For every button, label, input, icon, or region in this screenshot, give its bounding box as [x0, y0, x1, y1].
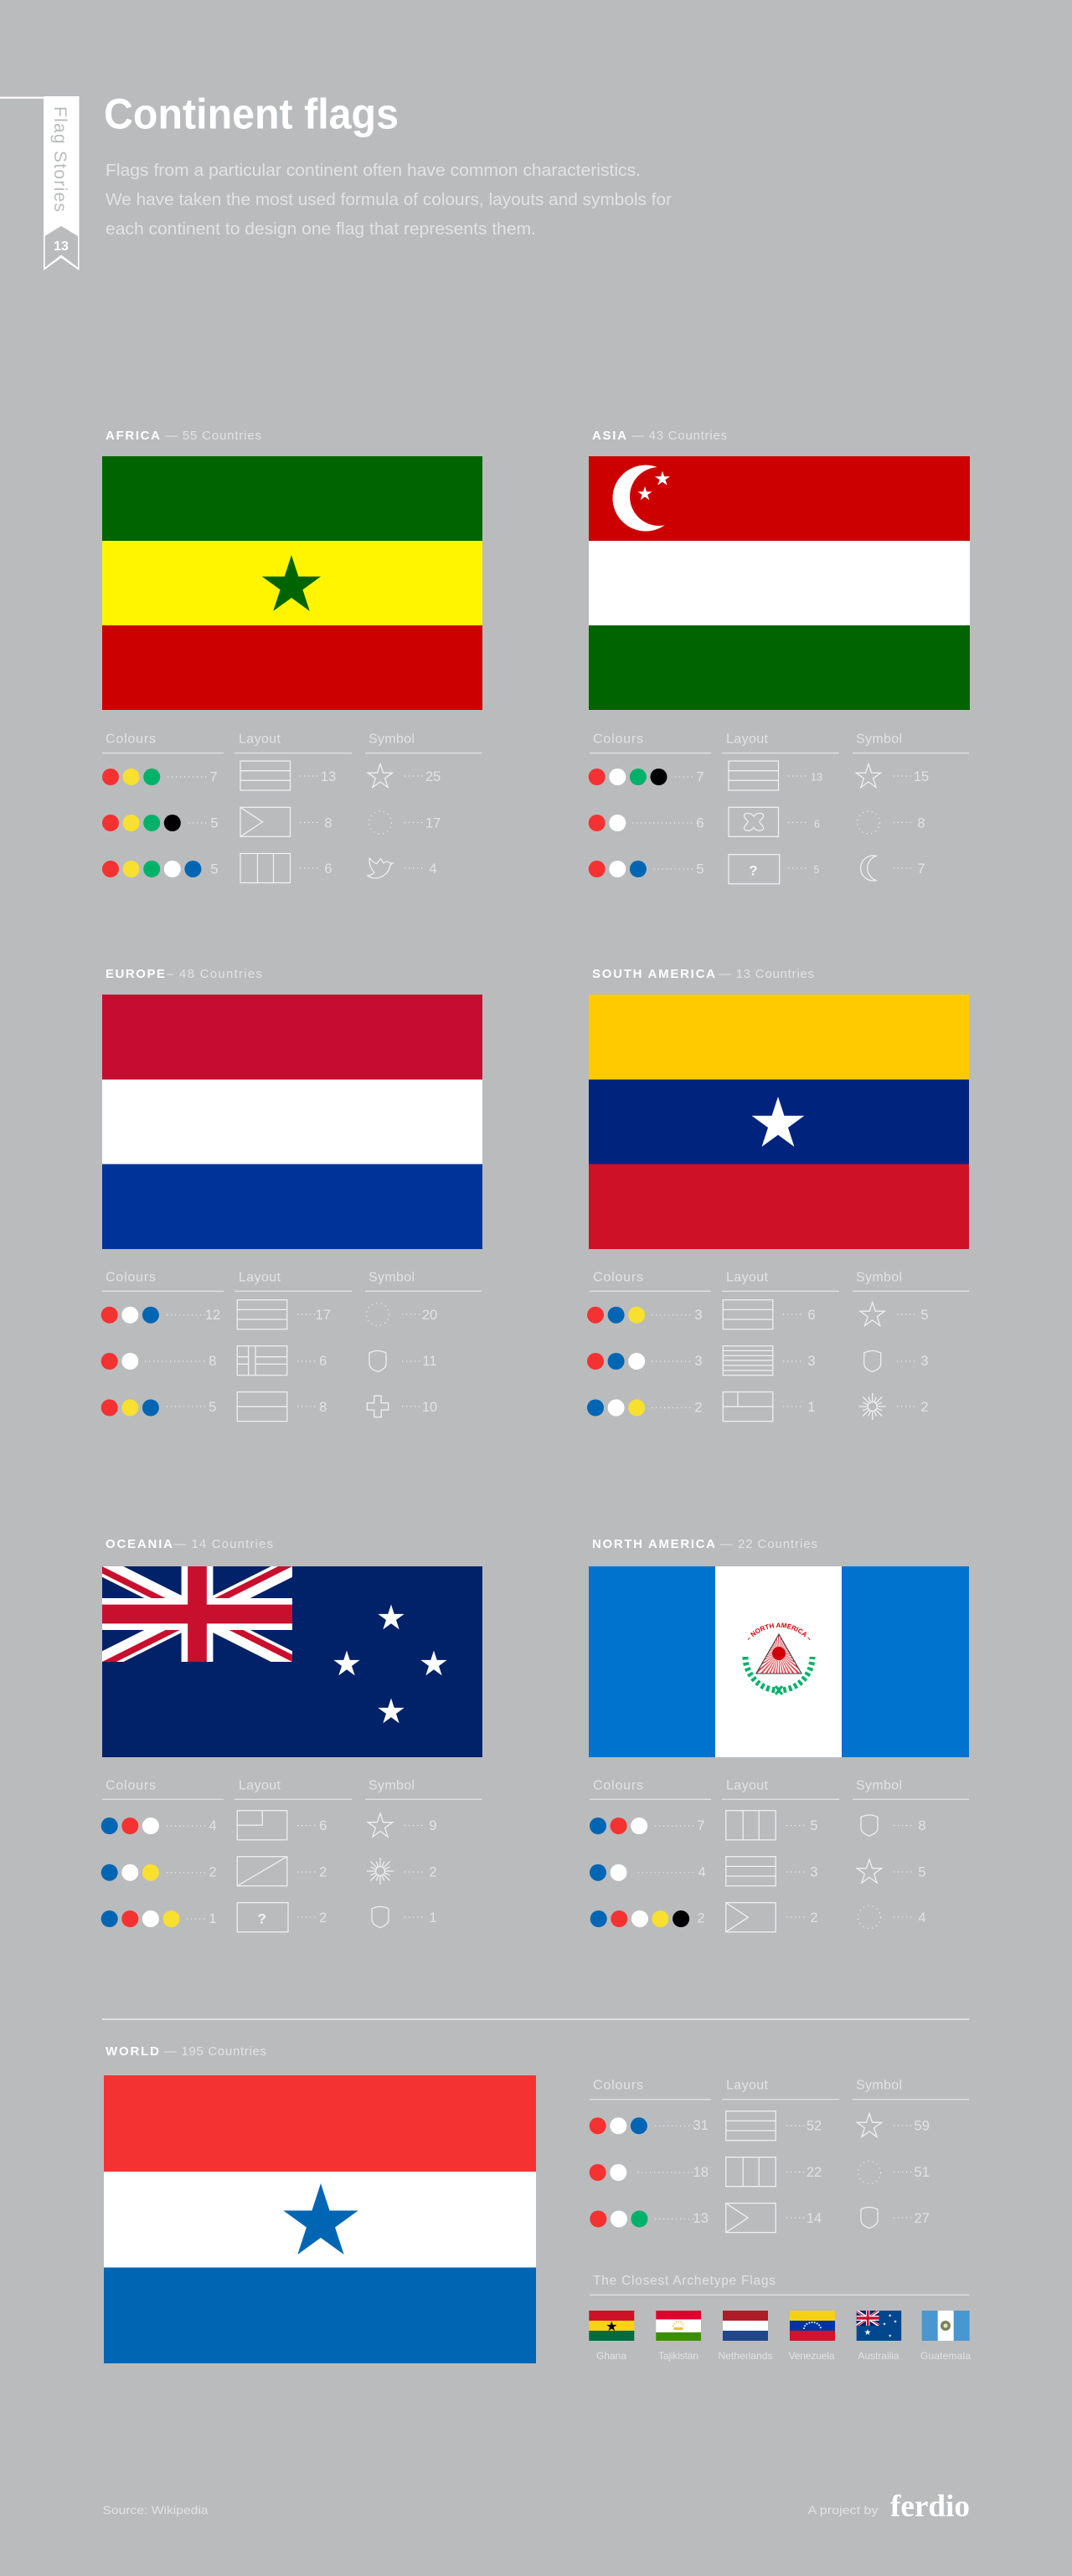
flag: Europe	[102, 995, 482, 1249]
stat headers: World	[590, 2079, 969, 2100]
symbols: World: 51	[915, 2165, 930, 2180]
colours: Asia: 6	[696, 815, 704, 830]
colours: South America: 3	[694, 1308, 703, 1323]
colours: North America: 2	[697, 1910, 705, 1926]
stat headers: North America: Symbol	[856, 1778, 902, 1792]
heading: South America: — 13 Countries	[719, 967, 814, 981]
symbols: North America: 5	[918, 1865, 926, 1880]
heading: North America: — 22 Countries	[720, 1537, 817, 1551]
stat headers: Asia: Symbol	[856, 732, 902, 746]
colours: South America	[587, 1307, 703, 1417]
heading: Europe	[106, 967, 262, 981]
layouts: World: 14	[807, 2211, 822, 2226]
symbols: Oceania: 1	[429, 1910, 437, 1926]
stat headers: Europe: Symbol	[368, 1271, 415, 1285]
layouts: Europe	[237, 1300, 331, 1422]
stat headers: Europe: Colours	[106, 1271, 156, 1285]
symbols: North America: 4	[918, 1910, 926, 1926]
heading: Europe: – 48 Countries	[167, 967, 262, 981]
emblem: triangle, wreath and arched text: – NORTH AMERICA –	[747, 1622, 811, 1640]
symbols: World	[857, 2113, 930, 2229]
stat headers: World: Layout	[726, 2079, 769, 2093]
symbols: Asia	[856, 764, 929, 881]
colours: South America: 3	[694, 1354, 703, 1369]
panel: Asia	[589, 429, 970, 884]
colours: Africa: 7	[209, 770, 218, 785]
stat headers: Europe	[102, 1271, 482, 1291]
heading: North America	[592, 1537, 817, 1551]
symbols: World: 27	[915, 2211, 930, 2226]
intro text	[106, 161, 672, 239]
layouts: Europe: 8	[319, 1400, 327, 1415]
flag: Australia: Austrailia	[858, 2350, 899, 2362]
colours: Oceania: 1	[209, 1911, 217, 1926]
colours: World	[590, 2117, 709, 2227]
panel: North America	[589, 1537, 969, 1932]
ribbon: Flag Stories 13: 13	[54, 239, 69, 254]
flag: Ghana	[589, 2311, 634, 2362]
colours: Asia	[589, 769, 704, 877]
colours: Africa	[102, 769, 219, 877]
layouts: Africa	[240, 761, 336, 882]
heading: Africa: AFRICA	[106, 429, 160, 443]
footer: credit: A project by	[807, 2503, 878, 2517]
flag: Tajikistan	[656, 2311, 701, 2362]
layouts: South America	[723, 1300, 816, 1422]
flag: Ghana: Ghana	[596, 2350, 626, 2362]
layouts: North America: 2	[810, 1910, 818, 1926]
stat headers: World: Symbol	[856, 2079, 902, 2093]
colours: Oceania	[101, 1818, 217, 1927]
symbols: World: 59	[915, 2118, 930, 2133]
emblem: triangle, wreath and arched text	[742, 1622, 816, 1695]
stat headers: Africa	[102, 732, 482, 753]
symbols: Europe: 20	[422, 1308, 437, 1323]
symbols: North America	[857, 1815, 926, 1929]
panel: South America	[587, 967, 969, 1422]
heading: Asia: — 43 Countries	[631, 429, 727, 443]
panel: closest archetype flags	[589, 2274, 971, 2362]
footer: credit: ferdio	[890, 2490, 970, 2523]
footer: credit	[807, 2490, 970, 2523]
stat headers: North America: Colours	[593, 1778, 643, 1792]
heading: Oceania: OCEANIA	[106, 1537, 173, 1551]
layouts: South America: 6	[807, 1308, 816, 1323]
flag: Netherlands: Netherlands	[719, 2350, 772, 2362]
heading: Asia: ASIA	[592, 429, 626, 443]
layouts: Asia: 5	[814, 864, 820, 876]
flag: Venezuela	[789, 2311, 835, 2362]
panel: Europe	[101, 967, 482, 1422]
flag: Guatemala	[920, 2311, 971, 2362]
stat headers: Oceania: Layout	[239, 1778, 281, 1792]
colours: World: 31	[693, 2118, 709, 2133]
stat headers: Oceania: Colours	[106, 1778, 156, 1792]
layouts: Oceania: ?	[258, 1911, 266, 1927]
symbols: Asia: 15	[914, 769, 929, 784]
colours: Asia: 5	[696, 862, 704, 877]
colours: Oceania: 4	[209, 1818, 217, 1833]
stat headers: Europe: Layout	[239, 1271, 281, 1285]
intro text: We have taken the most used formula of colours, layouts and symbols for	[106, 190, 672, 209]
intro text: Flags from a particular continent often have common characteristics.	[106, 161, 641, 180]
colours: World: 18	[693, 2165, 709, 2180]
symbols: North America: 8	[918, 1818, 926, 1833]
heading: Oceania: — 14 Countries	[173, 1537, 273, 1551]
colours: World: 13	[693, 2211, 709, 2226]
symbols: Africa	[368, 764, 441, 878]
stat headers: World: Colours	[593, 2079, 643, 2093]
flag: Netherlands	[719, 2311, 772, 2362]
footer: source: Source: Wikipedia	[102, 2503, 209, 2517]
stat headers: Oceania	[102, 1778, 482, 1799]
intro text: each continent to design one flag that represents them.	[106, 219, 536, 239]
colours: North America: 4	[698, 1865, 706, 1880]
symbols: South America	[859, 1303, 929, 1420]
heading: Africa: — 55 Countries	[165, 429, 261, 443]
title: Continent flags	[104, 90, 399, 137]
stat headers: Africa: Colours	[106, 732, 156, 746]
symbols: Oceania: 2	[429, 1865, 437, 1880]
flag: Africa	[102, 456, 482, 710]
stat headers: Africa: Layout	[239, 732, 281, 746]
layouts: North America	[726, 1811, 818, 1932]
heading: South America	[592, 967, 814, 981]
symbols: Asia: 8	[917, 815, 925, 830]
symbols: Africa: 4	[429, 861, 437, 877]
layouts: North America: 3	[810, 1865, 818, 1880]
stat headers: Asia	[590, 732, 969, 753]
layouts: Oceania: 2	[319, 1865, 327, 1880]
layouts: Europe: 17	[316, 1308, 331, 1323]
stat headers: Asia: Colours	[593, 732, 643, 746]
stat headers: North America: Layout	[726, 1778, 769, 1792]
heading: World: — 195 Countries	[164, 2044, 266, 2059]
symbols: Europe: 11	[422, 1354, 437, 1369]
flag: World	[104, 2075, 536, 2363]
layouts: Africa: 6	[324, 861, 332, 877]
stat headers: Africa: Symbol	[368, 732, 415, 746]
symbols: South America: 2	[920, 1400, 929, 1415]
flag: Tajikistan: Tajikistan	[658, 2350, 698, 2362]
flag: Venezuela: Venezuela	[789, 2350, 835, 2362]
heading: Africa	[106, 429, 261, 443]
layouts: Oceania	[237, 1811, 327, 1932]
symbols: South America: 3	[920, 1354, 929, 1369]
symbols: South America: 5	[920, 1308, 929, 1323]
colours: Asia: 7	[696, 770, 704, 785]
layouts: South America: 3	[807, 1354, 816, 1369]
stat headers: South America	[590, 1271, 969, 1291]
layouts: Africa: 8	[324, 815, 332, 830]
colours: Africa: 5	[210, 862, 219, 877]
panel: Africa	[102, 429, 482, 882]
heading: World: WORLD	[106, 2044, 159, 2059]
heading: Europe: EUROPE	[106, 967, 165, 981]
flag: South America	[589, 995, 969, 1249]
colours: South America: 2	[694, 1400, 703, 1415]
layouts: World	[726, 2111, 822, 2233]
stat headers: Oceania: Symbol	[368, 1778, 415, 1792]
heading: South America: SOUTH AMERICA	[592, 967, 715, 981]
layouts: World: 52	[807, 2118, 822, 2133]
symbols: Europe: 10	[422, 1400, 437, 1415]
stat headers: South America: Colours	[593, 1271, 643, 1285]
flag: Oceania	[102, 1566, 482, 1757]
symbols: Oceania: 9	[429, 1818, 437, 1833]
layouts: Europe: 6	[319, 1354, 327, 1369]
symbols: Africa: 25	[425, 769, 441, 784]
flag: Asia	[589, 456, 970, 710]
panel: Oceania	[101, 1537, 482, 1932]
heading: North America: NORTH AMERICA	[592, 1537, 715, 1551]
ribbon: Flag Stories 13	[0, 96, 79, 270]
layouts: South America: 1	[807, 1400, 816, 1415]
layouts: Asia	[729, 761, 822, 884]
colours: Oceania: 2	[209, 1865, 217, 1880]
colours: Europe: 5	[209, 1400, 216, 1415]
flag: Australia	[857, 2311, 901, 2362]
layouts: Oceania: 2	[319, 1910, 327, 1926]
layouts: World: 22	[807, 2165, 822, 2180]
layouts: Oceania: 6	[319, 1818, 327, 1833]
heading: archetype flags: The Closest Archetype Flags	[593, 2274, 776, 2288]
colours: North America: 7	[697, 1818, 705, 1833]
heading: World	[106, 2044, 266, 2059]
layouts: Asia: 6	[814, 819, 820, 830]
flag: Guatemala: Guatemala	[920, 2350, 971, 2362]
layouts: North America: 5	[810, 1818, 818, 1833]
colours: North America	[590, 1818, 706, 1927]
panel: World	[104, 2044, 969, 2363]
symbols: Africa: 17	[425, 815, 441, 830]
symbols: Oceania	[367, 1813, 437, 1927]
layouts: Africa: 13	[321, 769, 336, 784]
colours: Africa: 5	[210, 815, 219, 830]
heading: Oceania	[106, 1537, 273, 1551]
stat headers: South America: Symbol	[856, 1271, 902, 1285]
stat headers: South America: Layout	[726, 1271, 769, 1285]
colours: Europe: 8	[209, 1354, 216, 1369]
colours: Europe	[101, 1307, 220, 1417]
flag: North America	[589, 1566, 969, 1757]
symbols: Europe	[367, 1303, 437, 1417]
stat headers: North America	[590, 1778, 969, 1799]
stat headers: Asia: Layout	[726, 732, 769, 746]
colours: Europe: 12	[205, 1308, 220, 1323]
symbols: Asia: 7	[917, 861, 925, 877]
ribbon: Flag Stories 13: Flag Stories	[50, 106, 70, 212]
layouts: Asia: 13	[811, 772, 822, 784]
layouts: Asia: ?	[749, 862, 758, 879]
